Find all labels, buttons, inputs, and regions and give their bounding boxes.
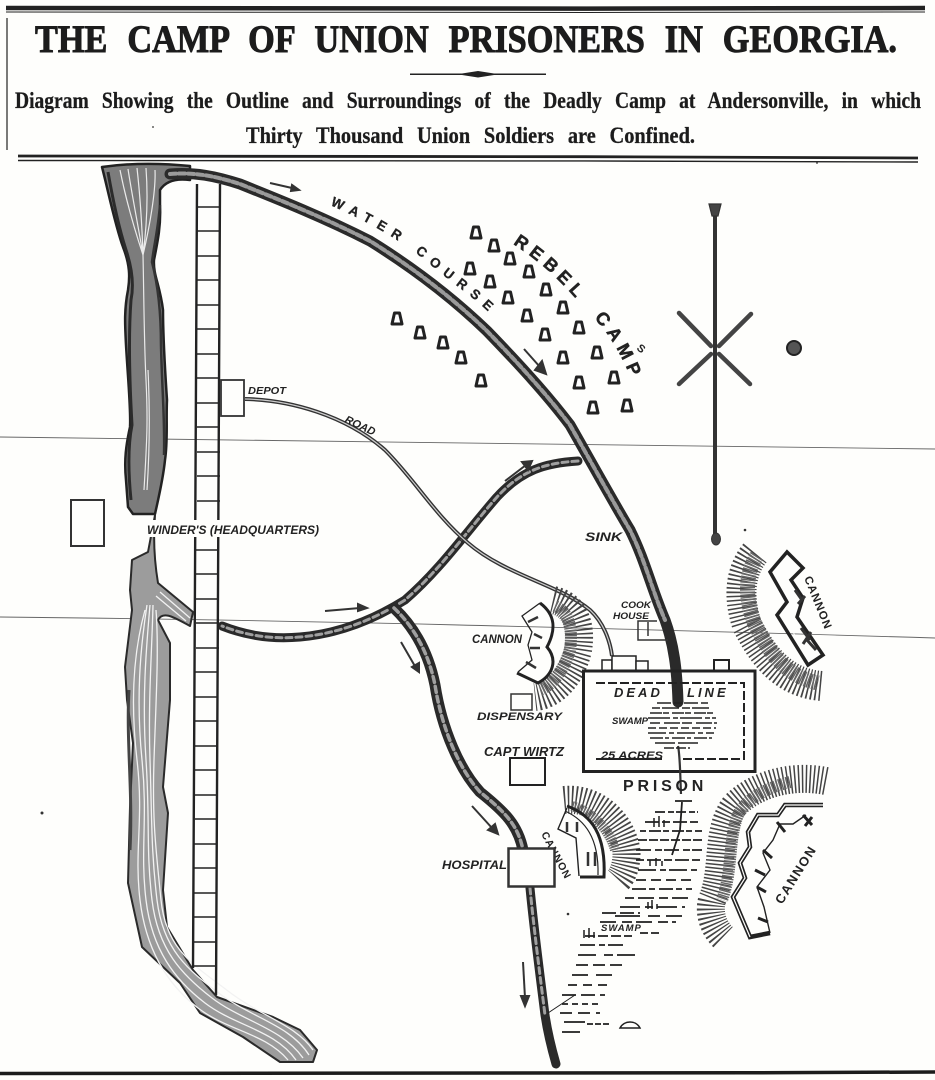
left river, upper reach — [102, 164, 190, 514]
label: rebel camp: REBEL — [514, 234, 580, 298]
labels: depot and road — [248, 386, 377, 438]
stream through prison — [678, 746, 681, 794]
hospital building and label: HOSPITAL — [442, 860, 507, 872]
labels: depot and road: DEPOT — [248, 386, 287, 397]
prison labels: 25 ACRES — [600, 750, 664, 762]
label: Winder's headquarters: WINDER'S (HEADQUARTERS) — [147, 523, 319, 537]
east earthwork and fort with cannon — [741, 552, 834, 686]
label: rebel camp: CAMP — [596, 312, 640, 374]
label: water course: WATER COURSE — [332, 196, 494, 312]
prison labels: LINE — [687, 685, 729, 700]
subtitle — [15, 88, 921, 149]
west earthwork and fort with cannon: CANNON — [472, 634, 523, 646]
bottom rule — [0, 1072, 935, 1074]
hospital stream — [394, 608, 556, 1064]
ornament divider — [410, 71, 546, 78]
prison labels: SWAMP — [612, 716, 649, 727]
dispensary building and label: DISPENSARY — [477, 711, 564, 723]
dispensary building and label — [477, 694, 564, 723]
flagpole with crossed cannon — [679, 204, 751, 545]
east earthwork and fort with cannon: CANNON — [801, 575, 834, 631]
road — [245, 399, 612, 656]
Capt. Wirtz building and label: CAPT WIRTZ — [484, 745, 565, 759]
south-centre earthwork and fort with cannon: CANNON — [538, 830, 573, 881]
south-centre earthwork and fort with cannon — [538, 800, 627, 881]
blot marker — [787, 341, 801, 355]
label: sink: SINK — [585, 530, 624, 544]
south-east earthwork and fort with cannon — [711, 779, 826, 938]
label: rebel camp: S — [634, 342, 647, 356]
newspaper fold lines — [0, 437, 935, 638]
cook house: COOK — [621, 600, 652, 611]
Capt. Wirtz building and label — [484, 745, 565, 785]
branch stream — [222, 461, 578, 638]
cook house: HOUSE — [613, 611, 650, 622]
west earthwork and fort with cannon — [472, 600, 579, 697]
dead line — [596, 683, 744, 759]
railroad — [193, 184, 220, 995]
label: southern swamp: SWAMP — [601, 923, 642, 934]
southern swamp — [548, 801, 703, 1032]
hospital building and label — [442, 848, 554, 886]
water course — [170, 173, 678, 702]
specks — [40, 126, 818, 915]
prison swamp — [648, 703, 717, 748]
Winder's headquarters building — [71, 500, 104, 546]
masthead rules and border — [6, 8, 925, 162]
prison labels: DEAD — [614, 685, 663, 700]
subtitle: Thirty Thousand Union Soldiers are Confined. — [246, 123, 695, 149]
left river, lower reach and side channel — [125, 515, 317, 1062]
prison labels: PRISON — [623, 778, 707, 795]
rebel camp tents — [392, 227, 632, 413]
south-east earthwork and fort with cannon: CANNON — [772, 843, 820, 907]
label: rebel camp — [514, 234, 647, 374]
prison labels — [600, 685, 729, 795]
depot building — [221, 380, 244, 416]
flow arrows — [270, 183, 546, 1006]
labels: depot and road: ROAD — [343, 414, 377, 438]
cook house — [613, 600, 668, 640]
prison stockade with outbuildings — [584, 656, 755, 772]
